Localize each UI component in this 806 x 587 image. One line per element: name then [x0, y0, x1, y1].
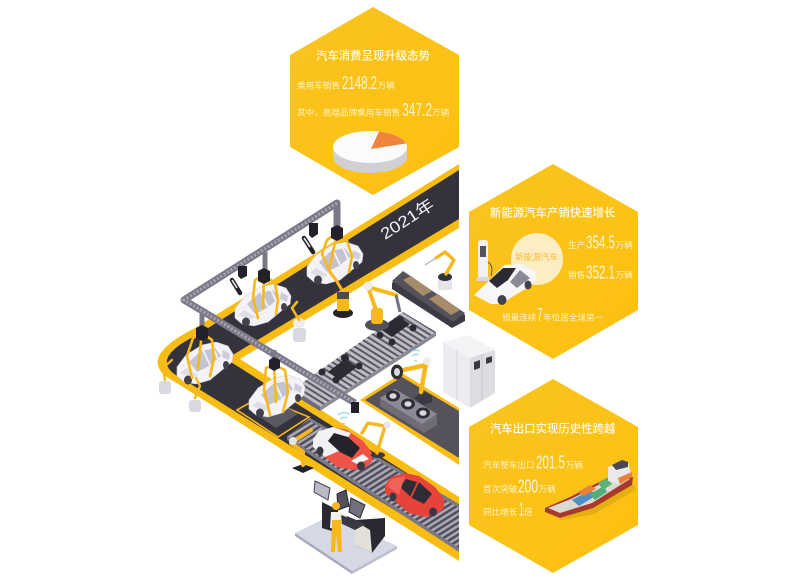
circle label: 新能源汽车 [515, 251, 558, 262]
stat: production: 万辆 [616, 239, 633, 250]
stat: sales [568, 262, 633, 282]
stat: global first: 销量连续 [502, 312, 537, 322]
robot: yellow base [330, 272, 353, 318]
stat: global first [502, 305, 604, 325]
tyres [386, 390, 430, 418]
yellow grippers [187, 233, 352, 415]
operator platform [295, 481, 397, 574]
red car [385, 473, 444, 517]
robot arm with tyre [391, 357, 432, 405]
stat: sales: 销售 [568, 269, 585, 280]
control consoles [314, 481, 385, 553]
lower conveyor belt [287, 418, 459, 552]
welding robot top right [425, 252, 454, 290]
stat: exports [483, 452, 583, 472]
stat: passenger car sales [297, 73, 395, 93]
cars on assembly line [177, 242, 363, 418]
middle conveyor with chassis [292, 312, 436, 411]
side robots on belt [159, 272, 353, 412]
tyre station [360, 357, 459, 465]
stat: passenger car sales: 乘用车销售 [297, 80, 340, 90]
worker [330, 502, 347, 552]
stat: doubled: 1 [519, 500, 524, 520]
icon: electric car [474, 264, 536, 305]
icon: cargo ship [545, 460, 636, 521]
white and red car [313, 427, 372, 470]
robot: white base 1 [292, 302, 306, 342]
stat: global first: 年位居全球第一 [543, 312, 604, 322]
year label on belt: 2021年 [377, 196, 437, 243]
stat: over 200: 万辆 [538, 483, 556, 494]
robot: right [362, 422, 390, 458]
stat: doubled: 倍 [524, 506, 533, 517]
stat: premium brand sales [297, 100, 450, 120]
robot: left [289, 430, 314, 473]
panel: vehicle exports [469, 379, 638, 573]
belt: assembly line yellow border [158, 164, 459, 561]
stat: production: 生产 [568, 239, 585, 250]
heading: 汽车出口实现历史性跨越 [490, 422, 616, 436]
panel: consumption upgrade [290, 7, 459, 195]
line robots near red car [289, 422, 390, 473]
circle label [511, 233, 563, 285]
stat: over 200: 200 [518, 476, 538, 496]
stat: exports: 汽车整车出口 [483, 459, 535, 470]
stat: passenger car sales: 万辆 [378, 80, 395, 90]
icon: charging pile [476, 240, 492, 281]
station under car [237, 397, 309, 437]
overhead gantry [184, 203, 359, 413]
pie chart [333, 131, 407, 173]
belt: dark track [167, 170, 459, 550]
stat: over 200: 首次突破 [483, 483, 518, 494]
stat: premium brand sales: 347.2 [402, 100, 432, 120]
stat: doubled: 同比增长 [483, 506, 518, 517]
heading: 新能源汽车产销快速增长 [490, 206, 616, 220]
heading: 汽车消费呈现升级态势 [316, 48, 431, 62]
battery rack [392, 271, 465, 328]
robot: white base 3 [189, 378, 201, 412]
stat: exports: 万辆 [566, 459, 583, 470]
stat: premium brand sales: 万辆 [432, 106, 450, 118]
robot: white base 2 [159, 360, 172, 394]
stat: over 200 [483, 476, 556, 496]
stat: production [568, 232, 633, 252]
stat: global first: 7 [537, 305, 542, 325]
stat: sales: 万辆 [616, 269, 633, 280]
chassis: upper [376, 316, 416, 346]
stat: doubled [483, 500, 533, 520]
assembly robot [364, 282, 400, 331]
stat: exports: 201.5 [536, 452, 565, 472]
stat: production: 354.5 [586, 232, 615, 252]
stat: premium brand sales: 其中，高端品牌乘用车销售 [297, 106, 400, 118]
panel: new energy vehicles [469, 164, 638, 359]
wifi icons [338, 350, 420, 424]
hanging scanners [238, 223, 318, 279]
gantry heads [196, 225, 343, 371]
stat: passenger car sales: 2148.2 [342, 73, 377, 93]
chassis: lower [318, 354, 362, 384]
stat: sales: 352.1 [586, 262, 615, 282]
control cabinet [443, 335, 495, 408]
